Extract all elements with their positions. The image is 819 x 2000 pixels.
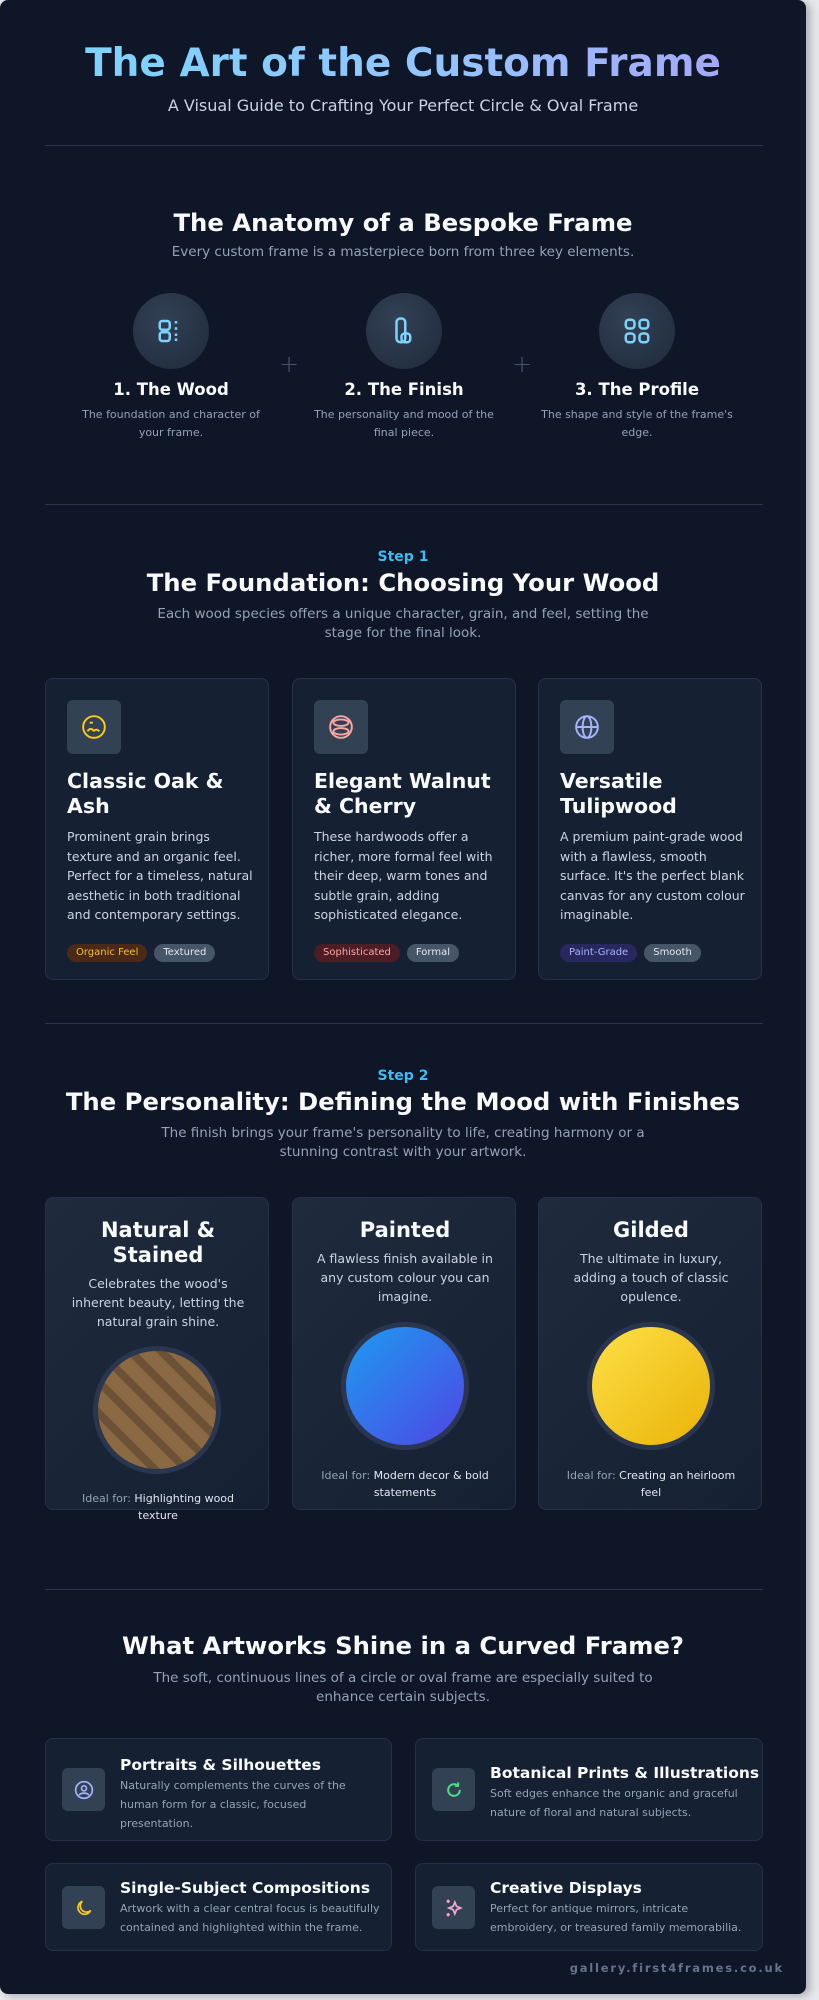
card: walnut: Formal: [416, 947, 450, 958]
card: walnut: These hardwoods offer a richer, more formal feel with their deep, warm tones and subtle grain, adding sophisticated elegance.: [314, 829, 493, 922]
swatch: gold: [587, 1322, 715, 1450]
card: single subject: [45, 1863, 392, 1951]
card: tulipwood: A premium paint-grade wood with a flawless, smooth surface. It's the perfect blank canvas for any custom colour imaginable.: [560, 829, 745, 922]
section heading: step 1: [146, 549, 659, 641]
element: finish: 2. The Finish: [344, 380, 464, 399]
icon: walnut: [314, 700, 368, 754]
card: creative: Creative Displays: [490, 1879, 642, 1897]
icon: oak: [67, 700, 121, 754]
icon: tulipwood: [560, 700, 614, 754]
section heading: artworks: [122, 1631, 684, 1705]
card: gilded: Gilded: [613, 1218, 689, 1242]
plus: +: [512, 350, 532, 378]
section heading: step 2: Step 2: [378, 1068, 428, 1084]
card: painted: [292, 1197, 516, 1510]
card: gilded: The ultimate in luxury, adding a touch of classic opulence.: [573, 1251, 729, 1304]
section heading: anatomy: Every custom frame is a masterpiece born from three key elements.: [172, 244, 634, 260]
icon: refresh: [432, 1768, 475, 1811]
card: oak: [45, 678, 269, 980]
card: tulipwood: [538, 678, 762, 980]
icon: profile: [599, 293, 675, 369]
card: botanical: nature of floral and natural subjects.: [490, 1806, 691, 1819]
icon: sparkle: [432, 1886, 475, 1929]
element: wood: [82, 293, 260, 439]
footer: gallery.first4frames.co.uk: [570, 1961, 784, 1975]
card: creative: Perfect for antique mirrors, intricate: [490, 1902, 688, 1915]
card: single subject: contained and highlighted within the frame.: [120, 1921, 362, 1934]
element: finish: [314, 293, 494, 439]
section heading: step 1: The Foundation: Choosing Your Wood: [147, 568, 659, 597]
element: profile: The shape and style of the frame's edge.: [541, 408, 733, 439]
card: oak: Classic Oak & Ash: [67, 769, 224, 818]
subtitle: A Visual Guide to Crafting Your Perfect Circle & Oval Frame: [168, 96, 638, 115]
card: painted: A flawless finish available in any custom colour you can imagine.: [317, 1251, 493, 1304]
element: profile: 3. The Profile: [575, 380, 699, 399]
card: botanical: Botanical Prints & Illustrations: [490, 1764, 759, 1782]
card: portraits: [45, 1738, 392, 1841]
element: finish: The personality and mood of the final piece.: [314, 408, 494, 439]
card: natural: [45, 1197, 269, 1510]
card: oak: Organic Feel: [76, 947, 138, 958]
card: tulipwood: Smooth: [653, 947, 692, 958]
section heading: step 1: Step 1: [378, 549, 428, 565]
card: natural: Celebrates the wood's inherent beauty, letting the natural grain shine.: [72, 1276, 244, 1329]
card: tulipwood: Paint-Grade: [569, 947, 628, 958]
section heading: step 2: [66, 1068, 740, 1160]
card: single subject: Single-Subject Compositions: [120, 1879, 370, 1897]
section heading: anatomy: [172, 208, 634, 260]
section heading: artworks: What Artworks Shine in a Curved Frame?: [122, 1631, 684, 1660]
icon: person: [62, 1768, 105, 1811]
card: portraits: Naturally complements the curves of the human form for a classic, focused presentation.: [120, 1779, 346, 1830]
card: gilded: [538, 1197, 762, 1510]
element: wood: 1. The Wood: [113, 380, 229, 399]
card: creative: embroidery, or treasured family memorabilia.: [490, 1921, 741, 1934]
icon: moon: [62, 1886, 105, 1929]
card: tulipwood: Versatile Tulipwood: [560, 769, 677, 818]
card: single subject: Artwork with a clear central focus is beautifully: [120, 1902, 380, 1915]
card: walnut: Sophisticated: [323, 947, 391, 958]
section heading: step 2: The Personality: Defining the Mood with Finishes: [66, 1087, 740, 1116]
section heading: step 1: Each wood species offers a unique character, grain, and feel, setting the stage for the final look.: [157, 606, 649, 641]
card: natural: Ideal for: Highlighting wood texture: [82, 1492, 234, 1522]
card: oak: Prominent grain brings texture and an organic feel. Perfect for a timeless, natural aesthetic in both traditional and contemporary settings.: [67, 829, 253, 922]
card: gilded: Ideal for: Creating an heirloom feel: [567, 1469, 735, 1499]
card: walnut: [292, 678, 516, 980]
section heading: anatomy: The Anatomy of a Bespoke Frame: [173, 208, 632, 237]
section heading: step 2: The finish brings your frame's personality to life, creating harmony or a stunning contrast with your artwork.: [161, 1125, 645, 1160]
element: wood: The foundation and character of your frame.: [82, 408, 260, 439]
swatch: wood: [93, 1346, 221, 1474]
card: natural: Natural & Stained: [101, 1218, 215, 1267]
card: painted: Ideal for: Modern decor & bold statements: [321, 1469, 489, 1499]
card: creative: [415, 1863, 763, 1951]
title: The Art of the Custom Frame: [85, 41, 721, 86]
card: oak: Textured: [163, 947, 206, 958]
icon: finish: [366, 293, 442, 369]
card: botanical: Soft edges enhance the organic and graceful: [490, 1787, 738, 1800]
plus: +: [279, 350, 299, 378]
section heading: artworks: The soft, continuous lines of a circle or oval frame are especially suited to enhance certain subjects.: [153, 1670, 653, 1705]
card: portraits: Portraits & Silhouettes: [120, 1756, 321, 1774]
card: botanical: [415, 1738, 763, 1841]
card: painted: Painted: [360, 1218, 450, 1242]
swatch: blue: [341, 1322, 469, 1450]
icon: wood: [133, 293, 209, 369]
element: profile: [541, 293, 733, 439]
card: walnut: Elegant Walnut & Cherry: [314, 769, 491, 818]
